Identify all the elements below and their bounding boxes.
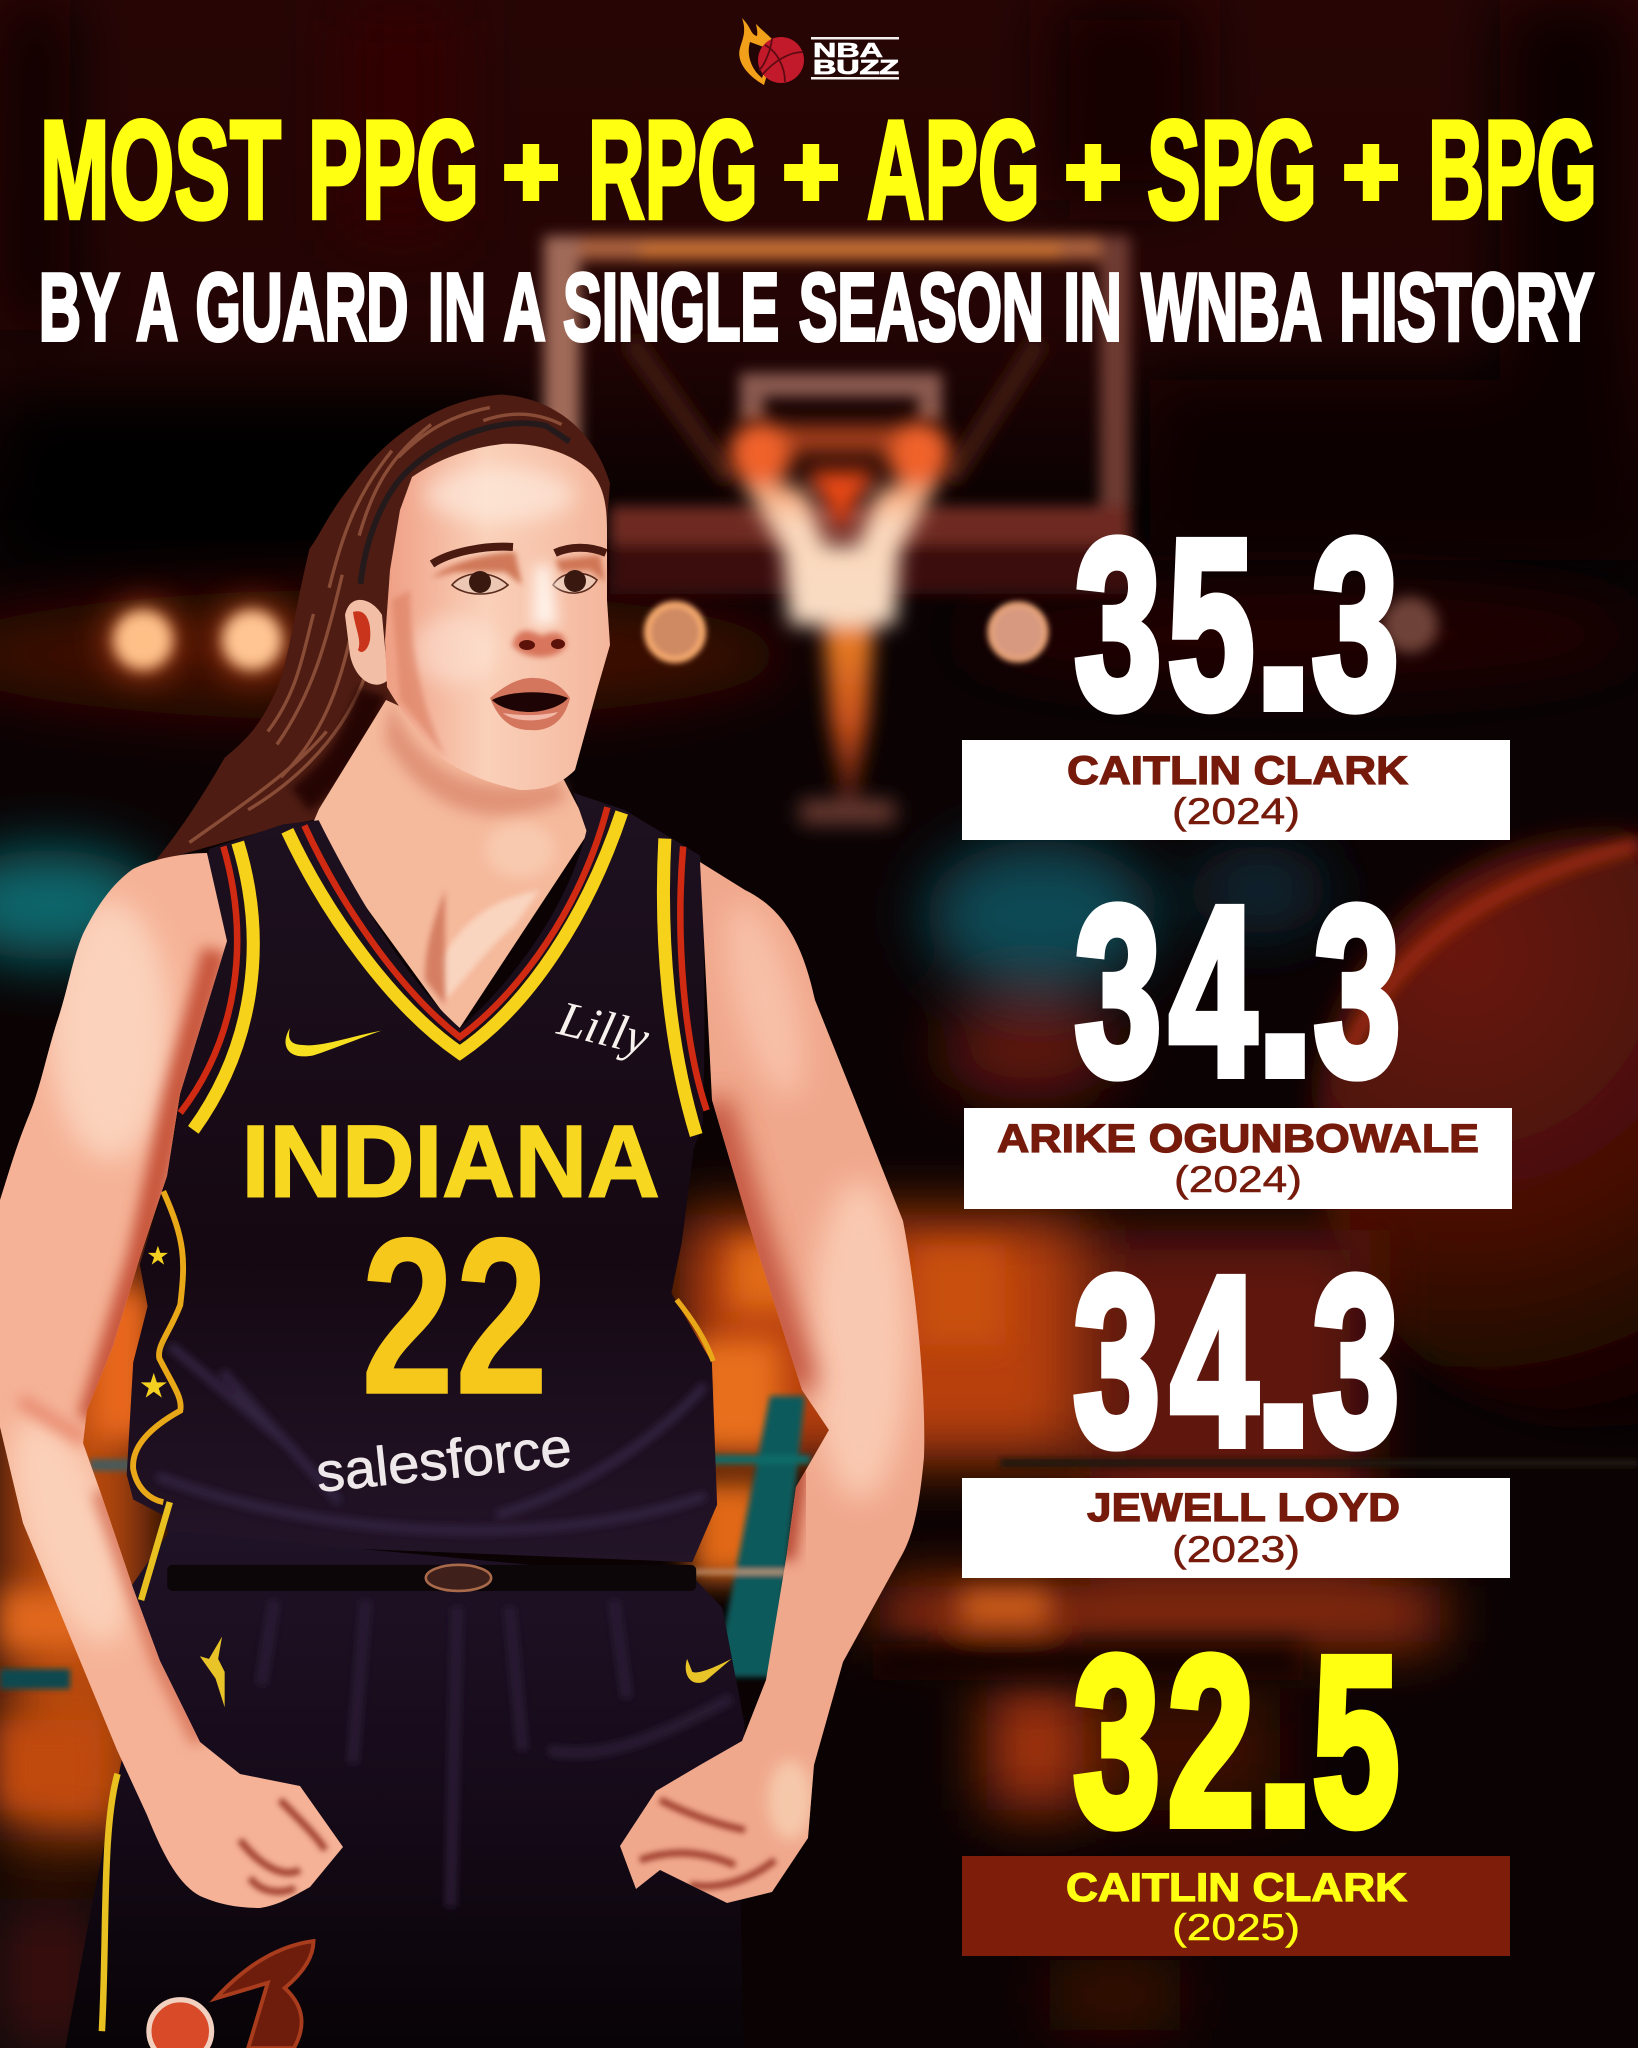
year: (2024): [1172, 791, 1300, 832]
title: APG: [867, 91, 1040, 248]
stat: 35.3 Caitlin Clark 2024: [962, 490, 1510, 840]
WNBA logoman: [200, 1637, 225, 1707]
player name: JEWELL LOYD: [1087, 1486, 1400, 1530]
value: 3: [1314, 857, 1401, 1125]
title: +: [1065, 116, 1121, 228]
year: (2025): [1172, 1907, 1300, 1948]
face: [385, 444, 610, 790]
year: (2024): [1174, 1159, 1302, 1200]
Fever F logo: [149, 1941, 313, 2048]
upper background streaks: [0, 0, 1638, 570]
knuckles: [640, 1800, 775, 1886]
jersey folds: [157, 1345, 705, 1530]
left arm and fist: [0, 840, 350, 1920]
title: SPG: [1147, 91, 1317, 248]
floor glows: [0, 1215, 1440, 2048]
value: .: [1255, 857, 1315, 1126]
value: 34: [1073, 1227, 1258, 1495]
name label box: [964, 1108, 1512, 1209]
title: MOST: [40, 91, 281, 248]
value: 35: [1075, 490, 1254, 758]
ear: [345, 600, 388, 685]
title: RPG: [588, 91, 758, 248]
nike swoosh: [285, 1028, 381, 1056]
player name: CAITLIN CLARK: [1066, 1866, 1407, 1910]
player name: ARIKE OGUNBOWALE: [997, 1117, 1479, 1161]
title: +: [1343, 116, 1399, 228]
stat: 32.5 Caitlin Clark 2025 highlighted: [962, 1607, 1510, 1956]
headband: [361, 423, 570, 584]
value: .: [1253, 490, 1313, 759]
neck and chest: [310, 700, 590, 1032]
value: .: [1255, 1607, 1315, 1876]
shorts: [65, 1502, 745, 2048]
value: 34: [1075, 857, 1256, 1125]
lips and mouth: [490, 678, 570, 730]
stat: 34.3 Jewell Loyd 2023: [962, 1227, 1510, 1578]
player name: CAITLIN CLARK: [1067, 749, 1408, 793]
name label box: [962, 1478, 1510, 1578]
title: +: [503, 116, 559, 228]
value: 3: [1313, 1227, 1399, 1495]
player: Caitlin Clark: [0, 394, 940, 2048]
eyebrows: [432, 547, 513, 564]
middle background glows: [0, 585, 1638, 1100]
title: PPG: [308, 91, 479, 248]
value: 3: [1312, 490, 1399, 758]
teal court lines: [0, 1396, 1638, 1689]
neck trim: [287, 812, 622, 1053]
backboard frame: [544, 236, 1140, 594]
right arm and fist: [620, 850, 940, 1920]
logo: NBA Buzz: [739, 18, 899, 85]
value: 5: [1313, 1607, 1399, 1875]
stars: ★: [138, 1368, 169, 1406]
logo wordmark BUZZ: BUZZ: [813, 57, 899, 79]
hoop and net: [729, 421, 950, 824]
buckle: [426, 1565, 491, 1591]
value: [1075, 490, 1399, 759]
shorts folds: [261, 1600, 731, 1907]
title: [40, 91, 1597, 248]
INDIANA: INDIANA: [242, 1104, 660, 1218]
title: +: [783, 116, 839, 228]
eyes: [452, 574, 508, 594]
value: .: [1253, 1227, 1313, 1496]
value: [1075, 857, 1401, 1126]
arena lights: [99, 596, 1438, 684]
right armhole trim: [663, 839, 696, 1135]
name label box: [962, 740, 1510, 840]
logo wordmark NBA: NBA: [813, 40, 883, 62]
number 22: 22: [361, 1191, 549, 1442]
shorts swoosh: [686, 1659, 731, 1683]
value: 32: [1073, 1607, 1254, 1875]
year: (2023): [1172, 1529, 1300, 1570]
Lilly sponsor: Lilly: [552, 990, 656, 1066]
value: [1073, 1227, 1399, 1496]
hair: [154, 394, 610, 862]
shorts side stripe: [102, 1502, 170, 2031]
eye socket shadow: [432, 552, 605, 585]
floor patches: [0, 1240, 1303, 1810]
left armhole trim: [193, 842, 253, 1130]
side panel trim: [133, 1191, 183, 1502]
background basketball: [1315, 835, 1638, 1425]
salesforce: salesforce: [313, 1415, 574, 1504]
nose: [532, 565, 558, 625]
jersey top: [127, 793, 717, 1562]
value: [1073, 1607, 1399, 1876]
icon: flaming basketball: [739, 18, 804, 85]
name label box: [962, 1856, 1510, 1956]
knuckles: [240, 1800, 325, 1892]
star: ★: [146, 1240, 170, 1270]
belt: [167, 1565, 696, 1591]
stat: 34.3 Arike Ogunbowale 2024: [964, 857, 1512, 1209]
